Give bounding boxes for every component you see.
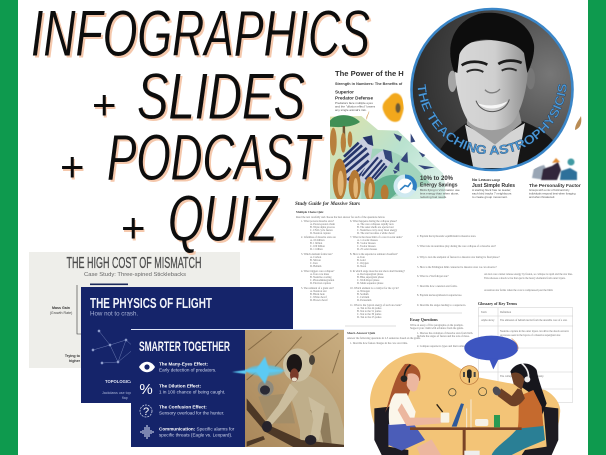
- standing meerkats back row: [330, 128, 352, 156]
- cup and pencil: [441, 413, 449, 423]
- left column multiple choice: C. Ten to the 30 joules: [357, 313, 381, 316]
- left column multiple choice: C. Wolf-Rayet phase: [357, 279, 380, 282]
- sound wave tail over slide panel: [232, 370, 246, 374]
- right column questions: 7. Describe how a neutron star forms.: [417, 285, 458, 288]
- text: just simple rules: A starling flock has no leader;: [472, 188, 511, 192]
- stat text: energy savings: reducing fuel needs.: [420, 195, 447, 199]
- left column multiple choice: D. 1 trillion: [310, 248, 323, 251]
- notes beside questions: An iron core cannot release energy by fusion, so collapse is rapid and the star dies.: [484, 273, 573, 276]
- left column multiple choice: D. Helium: [310, 265, 322, 268]
- left column multiple choice: D. Ten to the 25 joules: [357, 316, 381, 319]
- arm: [398, 403, 442, 426]
- face: [407, 373, 419, 391]
- left column multiple choice: D. Neon: [357, 265, 367, 268]
- left column multiple choice: A. Nitrogen: [357, 290, 370, 293]
- axis label: mass gain: Mass Gain: [52, 306, 70, 310]
- title line: quiz: QUIZ: [168, 181, 279, 255]
- left column multiple choice: B. Gold: [357, 259, 366, 262]
- icon: orange blob with bee: [383, 93, 404, 122]
- essay questions: 2. Compare supernova types and their remnants.: [417, 345, 469, 348]
- left column multiple choice: 9. In which stage does the star show shell burning?: [350, 270, 406, 273]
- icon: percent: %: [139, 381, 153, 398]
- text: just simple rules: to create group movement.: [472, 195, 508, 199]
- left column multiple choice: B. Ten to the 51 joules: [357, 310, 381, 313]
- icon: microphone badge: [460, 366, 479, 384]
- essay questions: [410, 317, 473, 348]
- illustration: meerkats, zebras and birds: [330, 115, 448, 201]
- acacia tree: [330, 115, 360, 127]
- superior predator defense block: Superior: [335, 90, 354, 94]
- left column multiple choice: A. 1.4 solar masses: [357, 239, 378, 242]
- left column multiple choice: A. Ten to the 44 joules: [357, 307, 381, 310]
- headphones: [404, 365, 410, 377]
- title line: slides: [92, 59, 305, 133]
- notes beside questions: [484, 273, 573, 292]
- left column multiple choice: 4. What triggers core collapse?: [301, 270, 335, 273]
- title line: slides: SLIDES: [137, 59, 305, 133]
- icon: animal silhouettes: [532, 158, 577, 180]
- blue sound wave: [245, 356, 286, 384]
- left column multiple choice: A. Iron: [357, 256, 365, 259]
- superior predator defense block: Predators face multiple eyes: [335, 101, 373, 105]
- glossary table: Alpha decay: [481, 319, 495, 322]
- jacket: [440, 121, 553, 169]
- right column questions: 4. Why is iron the endpoint of fusion in a massive star during its final phase?: [417, 256, 500, 259]
- text: just simple rules: each bird tracks 7 neighbours: [472, 192, 512, 196]
- left column multiple choice: A. Red supergiant phase: [357, 273, 384, 276]
- caption: jackdaws: flap: [122, 396, 128, 400]
- left column multiple choice: 1. What powers massive stars?: [301, 220, 335, 223]
- infographic subtitle: Strength in Numbers: The Benefits of Flocking: [335, 82, 420, 86]
- network diagram: [92, 330, 136, 364]
- left column multiple choice: Read the text carefully and choose the best answer for each of the questions below.: [296, 216, 385, 219]
- axis label: mass gain: [50, 306, 72, 315]
- text: personality factor: and when threatened.: [529, 195, 555, 199]
- slide heading: THE PHYSICS OF FLIGHT: [90, 295, 212, 312]
- title line: quiz: [121, 181, 279, 255]
- left column multiple choice: C. CNO cycle fusion: [310, 229, 333, 232]
- glossary table: The emission of helium nuclei from the unstable core of a star.: [500, 319, 568, 322]
- row: confusion effect: The Confusion Effect:: [159, 404, 207, 410]
- shirt: [518, 390, 543, 429]
- icon: eye: [139, 362, 155, 372]
- slide background: [29, 252, 240, 368]
- slide background: [131, 330, 245, 447]
- blue ring: [412, 9, 572, 170]
- left column multiple choice: Multiple Choice Quiz: [296, 210, 324, 214]
- hair: [510, 364, 547, 416]
- study guide heading: Study Guide for Massive Stars: [295, 202, 360, 207]
- left column multiple choice: B. Black hole: [310, 293, 326, 296]
- left column multiple choice: B. Sodium: [357, 293, 369, 296]
- small zebra: [359, 149, 393, 185]
- photo: vervet monkeys: [245, 330, 344, 447]
- green left border: [0, 0, 18, 455]
- superior predator defense block: Predator Defense: [335, 96, 373, 100]
- birds: [393, 133, 435, 174]
- right column questions: 5. How is the Eddington limit connected to massive stars we can observe?: [417, 266, 497, 269]
- stat: energy savings donut: [396, 176, 415, 196]
- left column multiple choice: A. Carbon: [310, 256, 322, 259]
- left column multiple choice: A. The core collapses rapidly now: [357, 223, 394, 226]
- left column multiple choice: 3. Which element forms last?: [301, 253, 333, 256]
- right column questions: [410, 235, 500, 313]
- left column multiple choice: 10. Which element is a catalyst for the cycle?: [350, 287, 400, 290]
- arm and hand: [498, 388, 525, 406]
- big zebra: [342, 135, 373, 184]
- left column multiple choice: Answer the following questions in 2-3 sentences based on the guide.: [347, 337, 421, 340]
- left column multiple choice: C. Neutrinos carry away most energy: [357, 229, 398, 232]
- ears: [448, 71, 457, 92]
- right column questions: 2. Explain the hydrostatic equilibrium in massive stars.: [417, 235, 477, 238]
- infographic preview: [330, 69, 581, 201]
- podcast illustration: [370, 336, 560, 455]
- left column multiple choice: D. Potassium: [357, 299, 372, 302]
- axis label: mass gain: (Growth Rate): [50, 311, 72, 315]
- label: topological: TOPOLOGICAL: [105, 379, 136, 384]
- left column multiple choice: C. 8 solar masses: [357, 245, 376, 248]
- row: communication: specific threats (Eagle vs. Leopard).: [159, 432, 232, 438]
- glossary table: The maximum luminosity a star can reach.: [500, 392, 546, 395]
- near arm: [266, 383, 298, 425]
- left column multiple choice: D. The star becomes a white dwarf: [357, 232, 395, 235]
- head: [283, 348, 312, 382]
- text: just simple rules: Just Simple Rules: [472, 183, 515, 189]
- study guide document: [295, 202, 573, 403]
- accent bar: [90, 284, 128, 285]
- front meerkats: [333, 159, 389, 201]
- shirt: [389, 393, 416, 425]
- shirt: [465, 123, 525, 168]
- left column multiple choice: B. 1 billion: [310, 242, 323, 245]
- essay questions: Support your claim with evidence from the guide.: [410, 327, 464, 330]
- left column multiple choice: 7. What is the mass limit of a core in solar units?: [350, 236, 403, 239]
- slide background: [81, 287, 293, 403]
- left column multiple choice: 8. How is the supernova remnant classified?: [350, 253, 398, 256]
- speech bubble: [464, 336, 518, 369]
- row: dilution effect: [139, 381, 225, 398]
- hair: [450, 13, 534, 73]
- title shadow: QUIZ: [170, 183, 281, 257]
- glossary table: The collapse of a core to nuclear density.: [500, 375, 544, 378]
- left column multiple choice: B. Blue supergiant phase: [357, 276, 385, 279]
- yellow background blob: [370, 353, 560, 455]
- caption: jackdaws: [102, 392, 131, 400]
- glossary table: Definition: [500, 311, 512, 314]
- essay questions: Write an essay of five paragraphs on the prompts.: [410, 324, 464, 327]
- left column multiple choice: C. Calcium: [357, 296, 370, 299]
- leg: [417, 439, 441, 455]
- chart axis: [76, 285, 81, 334]
- left column multiple choice: Short-Answer Quiz: [347, 331, 376, 335]
- title shadow: PODCAST: [109, 122, 325, 196]
- glossary table: Term: [481, 311, 488, 314]
- left column multiple choice: C. 100 billion: [310, 245, 326, 248]
- slide heading: THE HIGH COST OF MISMATCH: [66, 255, 202, 272]
- person right: [491, 363, 547, 455]
- stat text: energy savings: 10% to 20%: [420, 176, 454, 182]
- infographic title: The Power of the Herd: [335, 69, 416, 78]
- face: [455, 40, 528, 130]
- row: confusion effect: [140, 404, 224, 418]
- slide: the physics of flight: [81, 287, 293, 403]
- title line: slides: +: [92, 81, 117, 128]
- left column multiple choice: A. Iron core mass: [310, 273, 329, 276]
- title line: quiz: +: [122, 206, 147, 253]
- title line: slides: +: [93, 83, 118, 130]
- title line: quiz: +: [121, 204, 146, 251]
- text: personality factor: individuals respond best when foraging: [529, 192, 576, 196]
- row: communication: Communication: Specific alarms for: [159, 426, 235, 432]
- headphones: [522, 363, 529, 379]
- smile: [477, 101, 507, 108]
- person left: [385, 364, 449, 455]
- white halo: [402, 0, 582, 180]
- left column multiple choice: C. Iron: [310, 262, 318, 265]
- neck: [467, 108, 522, 145]
- title line: podcast: +: [60, 143, 85, 190]
- superior predator defense block: and the "dilution effect" lowers: [335, 104, 376, 108]
- slide: the high cost of mismatch: [29, 252, 240, 368]
- title shadow: INFOGRAPHICS: [33, 0, 372, 72]
- row: confusion effect: Sensory overload for the hunter.: [159, 410, 224, 416]
- right column questions: 8. Explain nucleosynthesis in supernovae.: [417, 294, 462, 297]
- left column multiple choice: A. 10 million: [310, 239, 325, 242]
- slide subtitle: Case Study: Three-spined Sticklebacks: [84, 272, 186, 278]
- left column multiple choice: B. 3 solar masses: [357, 242, 376, 245]
- glossary table: Glossary of Key Terms: [478, 301, 517, 306]
- row: many-eyes effect: Early detection of predators.: [159, 368, 216, 372]
- hair: [385, 364, 420, 413]
- left column multiple choice: 6. What happens during the collapse phase?: [350, 220, 398, 223]
- icon: question mark: ?: [143, 406, 149, 418]
- table and props: [410, 399, 522, 455]
- monkey body: [290, 376, 344, 445]
- notes beside questions: A neutron star forms when the core is compressed past the limit.: [484, 289, 553, 292]
- essay questions: 1. Discuss the evolution of massive stars from birth.: [417, 332, 473, 335]
- left column multiple choice: A. Proton-proton chain: [310, 223, 336, 226]
- eyebrows: [462, 61, 522, 65]
- branch: [247, 398, 345, 448]
- chairs: [374, 407, 558, 455]
- row: communication: [140, 425, 235, 439]
- skirt: [388, 423, 425, 451]
- pants: [492, 425, 545, 455]
- right column questions: 3. What role do neutrinos play during the core collapse of a massive star?: [417, 245, 497, 248]
- caption: trying to: higher: [69, 359, 81, 363]
- text: personality factor: The Personality Factor: [529, 183, 581, 189]
- hands: [262, 421, 272, 432]
- left column multiple choice: C. Photodisintegration: [310, 279, 335, 282]
- notes beside questions: This releases a shock wave that ejects the heavy elements from outer layers.: [484, 277, 566, 280]
- left column multiple choice: D. Main sequence phase: [357, 282, 384, 285]
- stat text: energy savings: Birds flying in V-formation use: [420, 188, 460, 192]
- caption: trying to: [65, 354, 81, 363]
- right column questions: 6. What is a Wolf-Rayet star?: [417, 275, 449, 278]
- left column multiple choice: B. Triple alpha process: [310, 226, 335, 229]
- title line: podcast: +: [61, 145, 86, 192]
- slide: smarter together: [131, 329, 345, 448]
- slide subtitle: How not to crash.: [90, 310, 138, 318]
- left column multiple choice: D. Brown dwarf: [310, 299, 328, 302]
- eyes: [467, 69, 517, 72]
- left column multiple choice: 11. What is the typical energy of such an event?: [350, 304, 402, 307]
- row: dilution effect: 1 in 100 chance of being caught.: [159, 390, 225, 394]
- stat text: energy savings: less energy than when alone,: [420, 192, 459, 196]
- slide heading: SMARTER TOGETHER: [139, 338, 230, 354]
- title shadow: [33, 0, 372, 257]
- left column multiple choice: C. Oxygen: [357, 262, 369, 265]
- title line: podcast: PODCAST: [107, 120, 323, 194]
- left column multiple choice: [296, 210, 421, 345]
- nose: [485, 89, 500, 93]
- text: just simple rules: No Leadership: [472, 177, 500, 182]
- face: [511, 373, 524, 390]
- second monkey: [258, 393, 295, 423]
- left column multiple choice: D. Neutron capture: [310, 232, 331, 235]
- left column multiple choice: A. Neutron star: [310, 290, 327, 293]
- left column multiple choice: D. 25 solar masses: [357, 248, 377, 251]
- glossary table: [478, 301, 573, 403]
- row: many-eyes effect: The Many-Eyes Effect:: [159, 362, 208, 366]
- left column multiple choice: B. The outer shells are ejected out: [357, 226, 394, 229]
- icon: sound wave: [140, 425, 154, 439]
- left column multiple choice: 1. Describe how fusion changes in the core over time.: [350, 342, 408, 345]
- icon: feather left: [366, 111, 369, 120]
- right column questions: 9. Describe the stages leading to a supernova.: [417, 304, 466, 307]
- green right border: [588, 0, 606, 455]
- left column multiple choice: C. White dwarf: [310, 296, 327, 299]
- glossary table: Neutrino capture in the outer layers can drive the shock onward.: [500, 330, 569, 333]
- left column multiple choice: 5. The remnant of a giant star?: [301, 287, 335, 290]
- profile badge: [402, 8, 574, 180]
- top highlight: [131, 329, 344, 330]
- text: personality factor: [529, 183, 581, 199]
- left column multiple choice: B. Neutrino cooling: [310, 276, 332, 279]
- text: personality factor: Groups with a mix of bold and shy: [529, 188, 570, 192]
- superior predator defense block: [335, 90, 376, 112]
- icon: small reaction badges: [449, 388, 487, 396]
- row: dilution effect: The Dilution Effect:: [159, 384, 202, 388]
- left column multiple choice: D. Electron capture: [310, 282, 332, 285]
- icon: feather right: [575, 116, 581, 130]
- caption: jackdaws: Jackdaws use topological rules: [102, 391, 152, 395]
- stat text: energy savings: [420, 176, 460, 199]
- text: just simple rules: [472, 177, 515, 199]
- superior predator defense block: any single animal's risk.: [335, 108, 367, 112]
- row: many-eyes effect: [139, 362, 216, 372]
- title line: podcast: [60, 120, 323, 194]
- caption: trying to: Trying to: [65, 354, 81, 358]
- portrait photo: [410, 8, 575, 173]
- left column multiple choice: B. Silicon: [310, 259, 321, 262]
- left column multiple choice: 2. Lifetimes of massive stars are: [301, 236, 337, 239]
- essay questions: Include the stages of fusion and the role of mass.: [417, 335, 470, 338]
- essay questions: Essay Questions: [410, 317, 438, 322]
- stat text: energy savings: Energy Savings: [420, 182, 458, 188]
- title block: [31, 0, 372, 257]
- title shadow: SLIDES: [139, 61, 307, 135]
- glossary table: A process seen in the layers of a massive supergiant star.: [500, 334, 561, 337]
